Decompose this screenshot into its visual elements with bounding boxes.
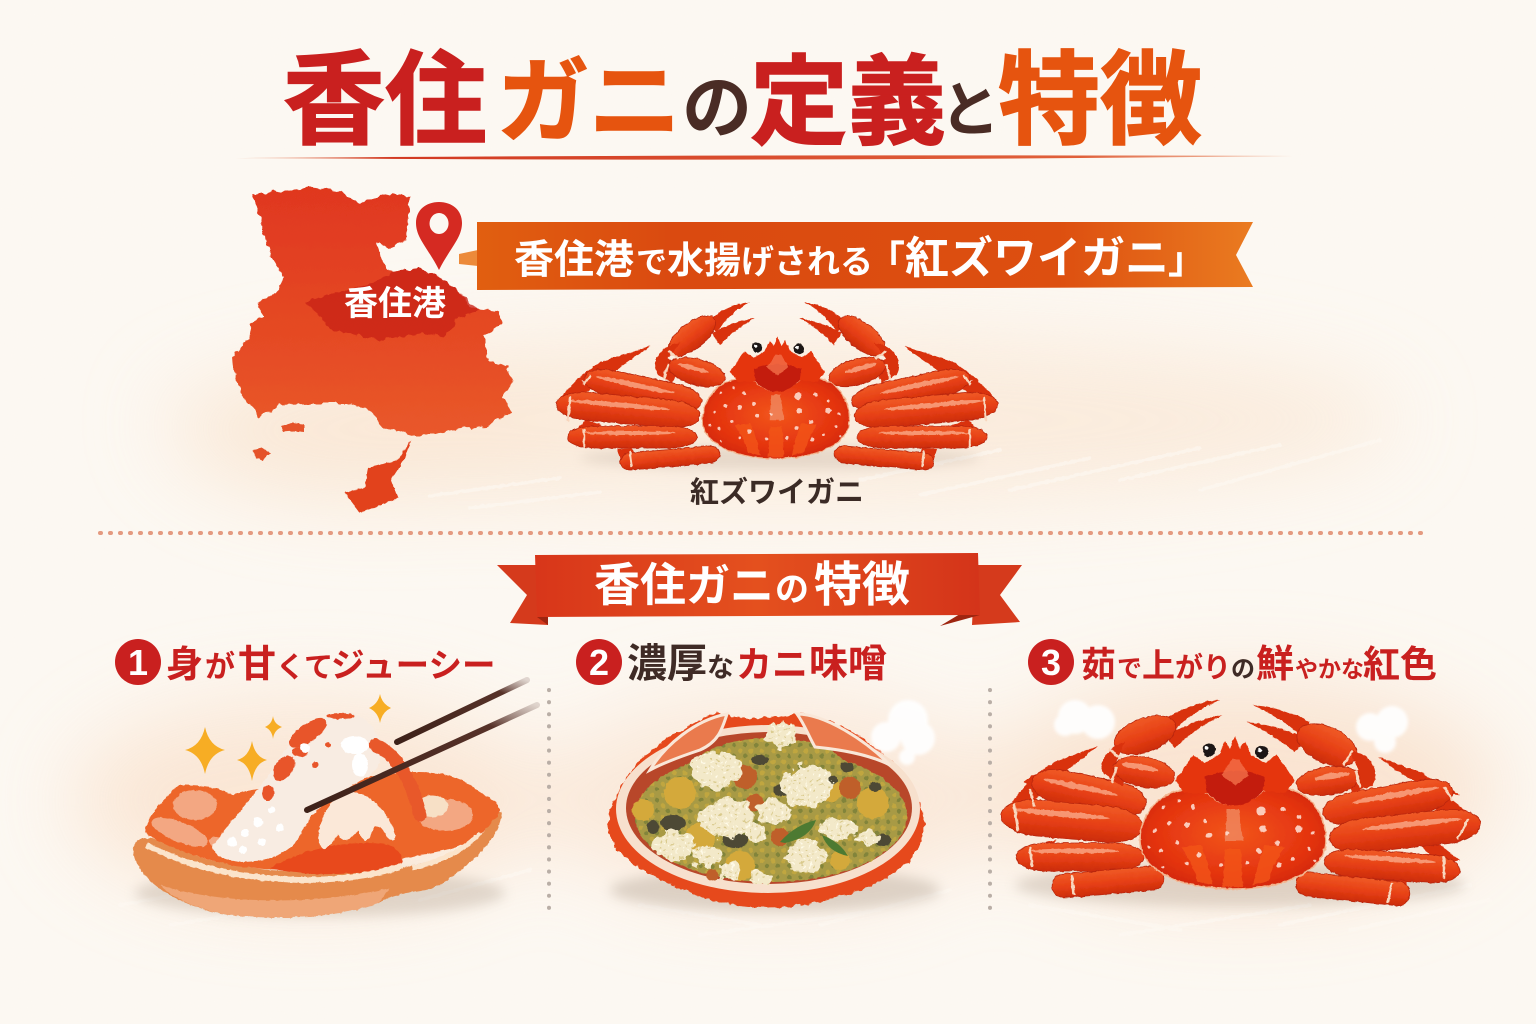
feature 1 heading: ジューシー bbox=[331, 648, 496, 685]
title: と bbox=[940, 77, 1000, 144]
banner: Kasumi port: で bbox=[636, 245, 667, 280]
feature 3 heading: 茹 bbox=[1081, 646, 1116, 685]
feature 1 heading: 甘 bbox=[238, 644, 276, 686]
feature 3 heading: の bbox=[1231, 656, 1255, 683]
chopsticks bbox=[307, 680, 537, 810]
feature 3 heading: 上 bbox=[1142, 647, 1175, 684]
banner: Kasumi port: げされる bbox=[741, 243, 873, 280]
title: ガニ bbox=[497, 52, 681, 154]
feature 2 heading bbox=[576, 639, 887, 686]
feature 1 heading bbox=[115, 639, 496, 686]
sparkles bbox=[185, 694, 391, 781]
dotted divider bbox=[100, 531, 1430, 535]
feature 1 heading: くて bbox=[276, 652, 333, 684]
vertical dotted separators bbox=[549, 690, 990, 908]
title bbox=[283, 44, 1202, 158]
icon: location pin bbox=[416, 202, 462, 270]
steam clouds bbox=[1054, 700, 1408, 753]
section ribbon: 香住 bbox=[594, 559, 686, 611]
banner: Kasumi port: 紅ズワイガニ bbox=[905, 234, 1169, 283]
feature 1 heading: 1 bbox=[128, 642, 148, 683]
feature 2 heading: 味噌 bbox=[809, 643, 887, 686]
banner: Kasumi port: 香住港 bbox=[514, 238, 634, 282]
feature 2 heading: カニ bbox=[736, 644, 808, 685]
title underline bbox=[235, 155, 1293, 160]
illustration: crab meat with chopsticks bbox=[133, 680, 537, 917]
title: の bbox=[682, 69, 752, 147]
feature 2 heading: 2 bbox=[589, 642, 609, 683]
feature 3 heading: 鮮 bbox=[1256, 644, 1294, 686]
feature 3 heading: 3 bbox=[1041, 642, 1061, 683]
feature 3 heading: やかな bbox=[1295, 656, 1364, 682]
brush strokes bbox=[120, 440, 1490, 935]
feature 1 heading: 身 bbox=[166, 644, 203, 685]
map label: 香住港 bbox=[344, 285, 446, 323]
steam bbox=[871, 700, 935, 765]
banner: Kasumi port: 「 bbox=[867, 240, 905, 282]
section ribbon: 特徴 bbox=[814, 559, 910, 612]
feature 3 heading: がり bbox=[1175, 651, 1231, 683]
watercolour wash: lower section bbox=[70, 680, 1500, 900]
feature 2 heading: 濃厚 bbox=[627, 642, 707, 686]
illustration: boiled crab bbox=[1000, 700, 1482, 907]
title: 定義 bbox=[750, 47, 946, 157]
feature 3 heading bbox=[1028, 639, 1437, 686]
crab caption: 紅ズワイガニ bbox=[690, 475, 864, 509]
map of Hyogo bbox=[233, 187, 512, 513]
banner: Kasumi port bbox=[459, 222, 1253, 290]
watercolour wash: upper section bbox=[160, 335, 1400, 505]
feature 3 heading: で bbox=[1117, 655, 1142, 683]
banner: Kasumi port: 」 bbox=[1168, 240, 1206, 282]
section ribbon: ガニ bbox=[686, 562, 774, 611]
illustration: crab miso in shell bbox=[608, 700, 940, 912]
section ribbon bbox=[497, 553, 1022, 626]
section ribbon: の bbox=[775, 571, 809, 609]
crab illustration: red snow crab bbox=[555, 302, 999, 471]
title: 特徴 bbox=[998, 44, 1202, 158]
banner: Kasumi port: 水揚 bbox=[667, 240, 741, 281]
feature 3 heading: 紅色 bbox=[1363, 644, 1437, 685]
feature 1 heading: が bbox=[205, 650, 235, 684]
title: 香住 bbox=[283, 44, 487, 158]
feature 2 heading: な bbox=[707, 653, 734, 683]
